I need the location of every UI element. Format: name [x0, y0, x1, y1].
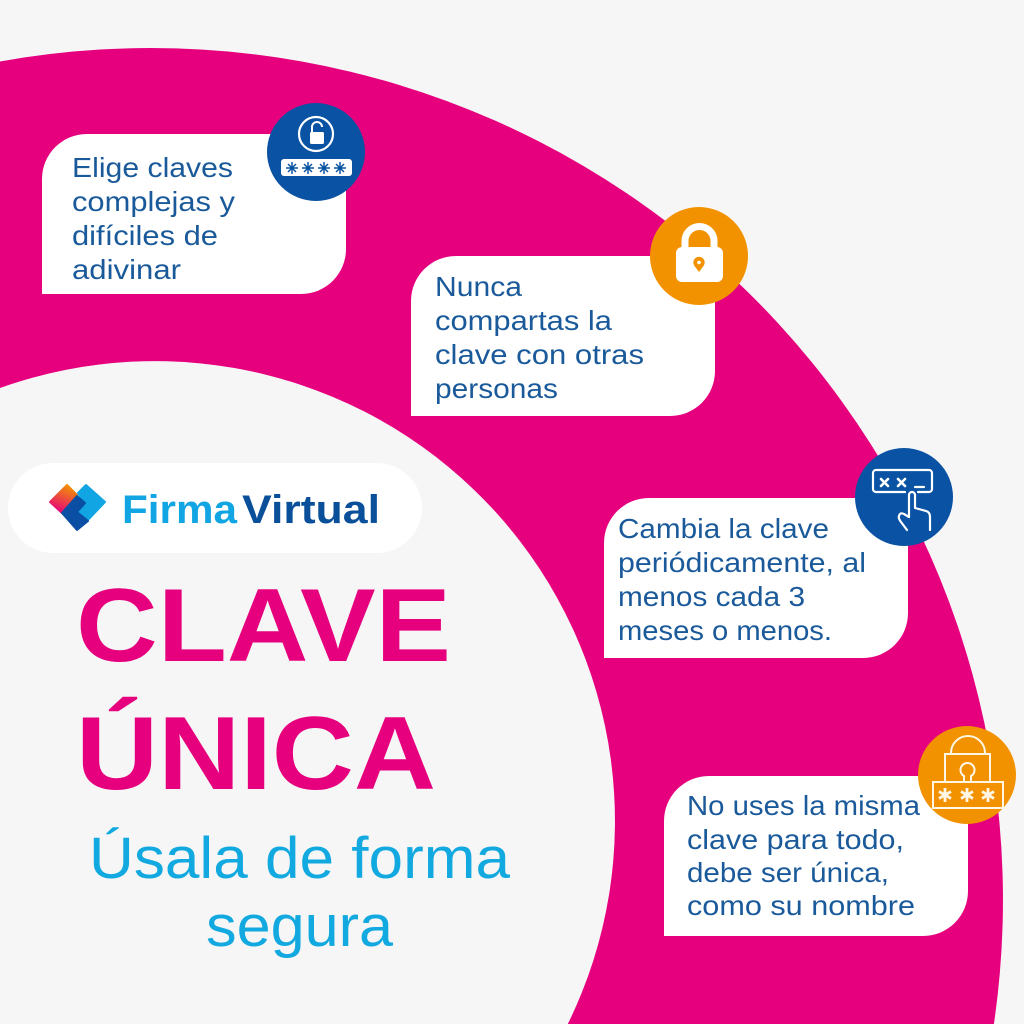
card: change periodically: periódicamente, al: [618, 547, 866, 578]
card: complex passwords: adivinar: [72, 254, 181, 285]
title: CLAVE: [76, 568, 451, 684]
icon: password entry with finger: [855, 448, 953, 546]
card: do not reuse: como su nombre: [687, 890, 915, 921]
logo wordmark: Firma: [122, 488, 238, 532]
card: never share: [411, 256, 715, 416]
card: change periodically: [604, 498, 908, 658]
icon: closed padlock: [650, 207, 748, 305]
card: do not reuse: [664, 776, 968, 936]
subtitle: Úsala de forma: [89, 826, 511, 891]
card: never share: clave con otras: [435, 339, 644, 370]
card: do not reuse: debe ser única,: [687, 857, 889, 888]
logo wordmark: [122, 488, 380, 532]
card: change periodically: menos cada 3: [618, 581, 805, 612]
logo pill: [8, 463, 422, 553]
card: change periodically: meses o menos.: [618, 615, 832, 646]
card: complex passwords: [42, 134, 346, 294]
logo wordmark: Virtual: [242, 488, 380, 532]
subtitle: [89, 826, 511, 959]
card: complex passwords: Elige claves: [72, 152, 233, 183]
title: ÚNICA: [76, 696, 436, 812]
card: never share: Nunca: [435, 271, 522, 302]
icon: open padlock with password: [267, 103, 365, 201]
card: never share: personas: [435, 373, 558, 404]
card: do not reuse: clave para todo,: [687, 824, 904, 855]
subtitle: segura: [206, 894, 394, 959]
card: complex passwords: complejas y: [72, 186, 235, 217]
logo mark: [50, 485, 105, 530]
icon: padlock with password: [918, 726, 1016, 824]
card: do not reuse: No uses la misma: [687, 790, 920, 821]
card: change periodically: Cambia la clave: [618, 513, 829, 544]
card: complex passwords: difíciles de: [72, 220, 218, 251]
card: never share: compartas la: [435, 305, 612, 336]
title: [76, 568, 451, 812]
